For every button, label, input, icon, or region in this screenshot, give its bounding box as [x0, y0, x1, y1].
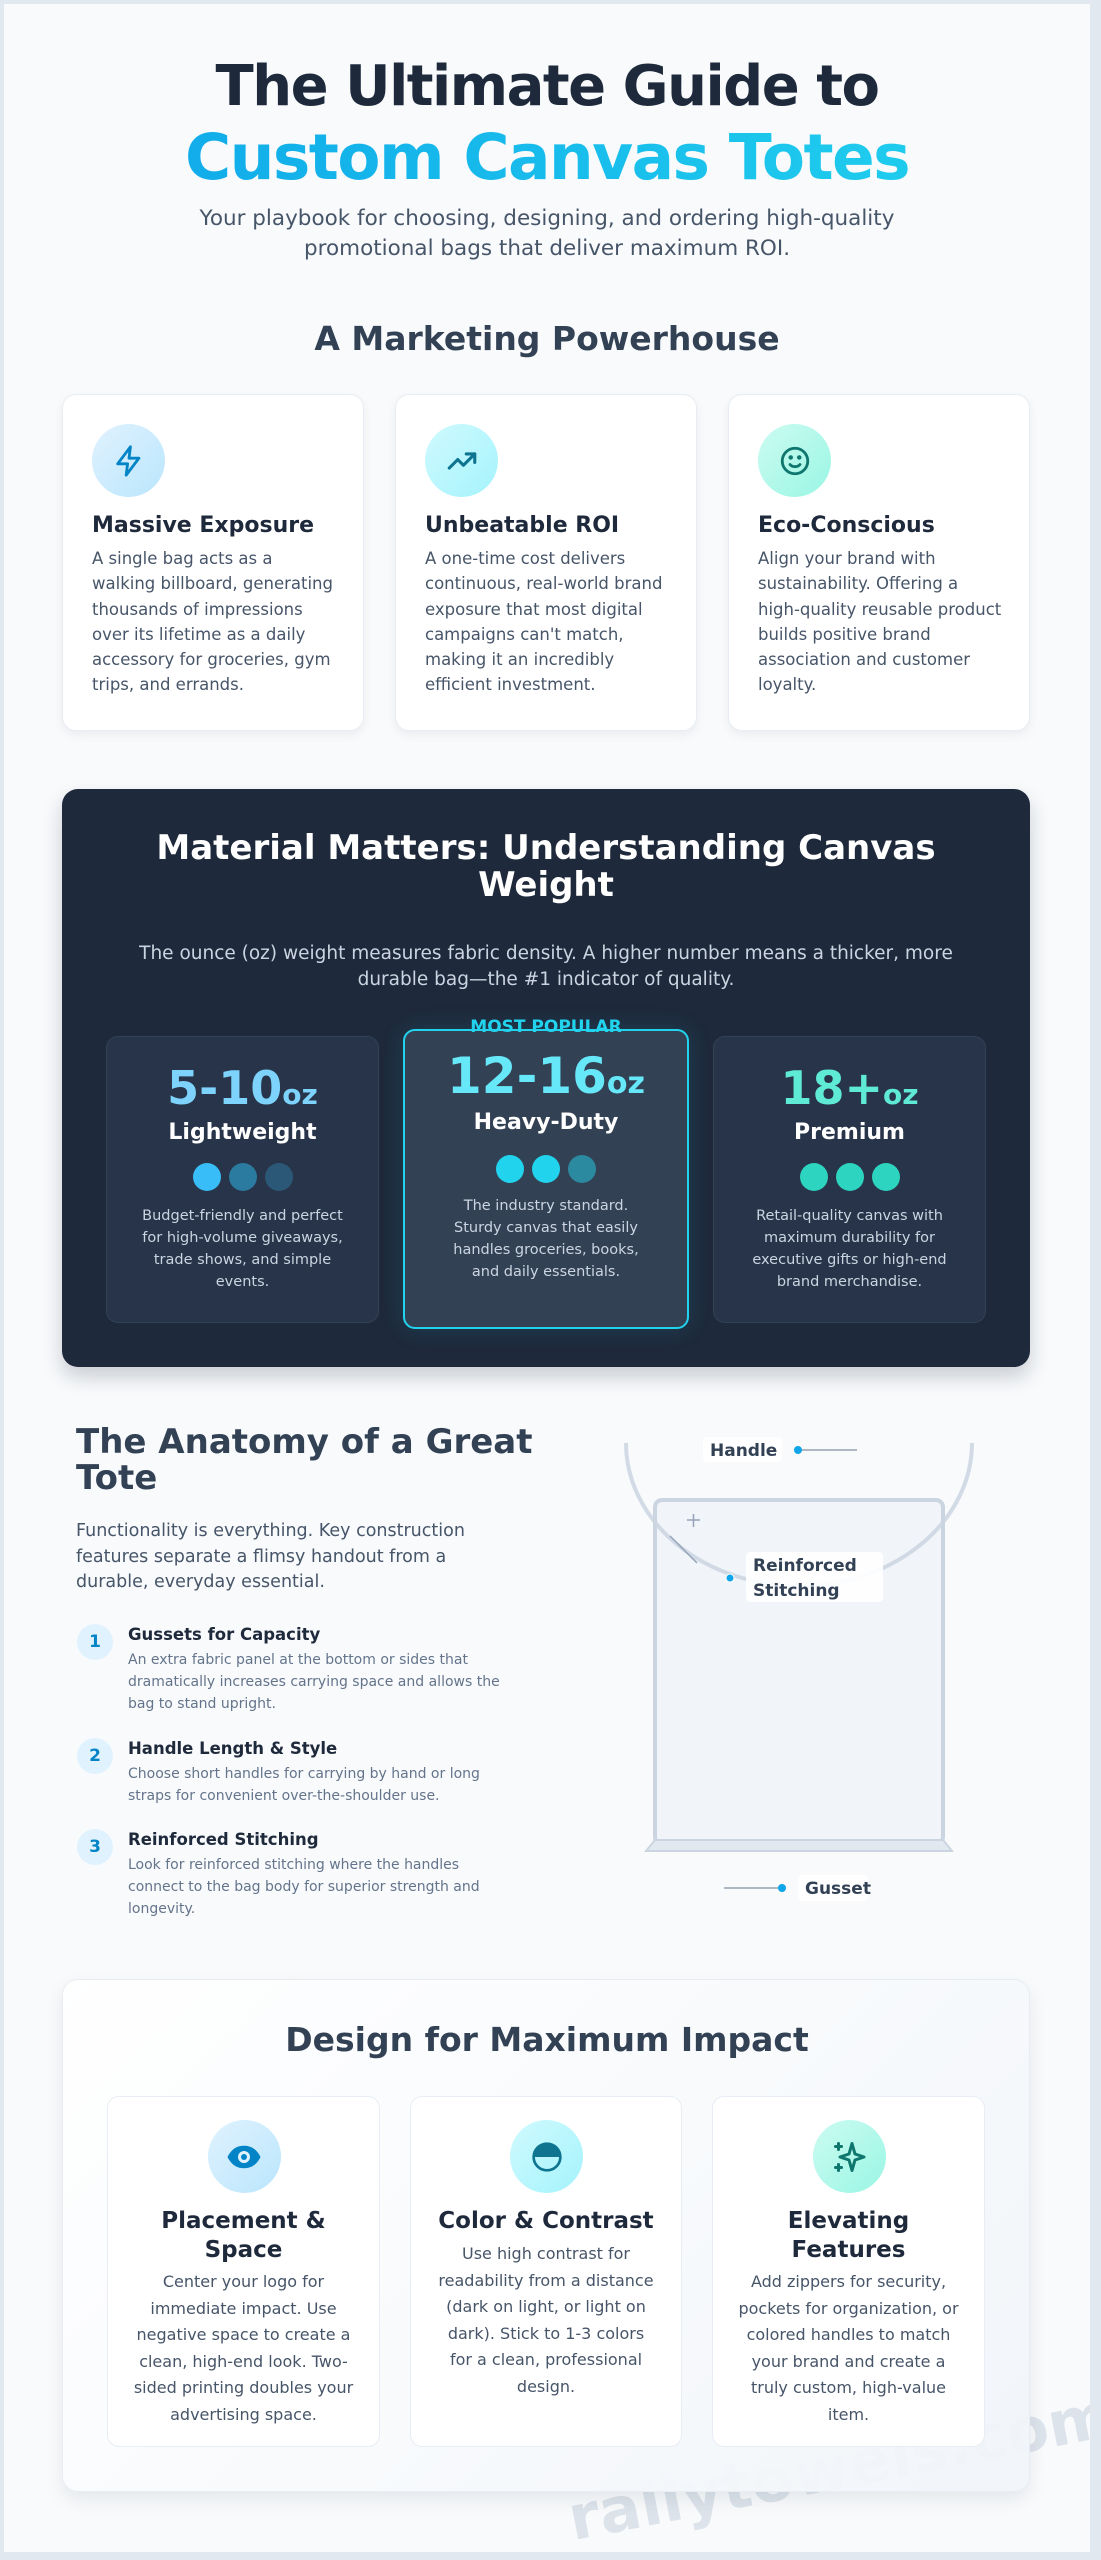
icon: smile	[758, 424, 831, 497]
weight card: premium	[713, 1036, 986, 1323]
panel description: The ounce (oz) weight measures fabric density. A higher number means a thicker, more durable bag—the #1 indicator of quality.	[139, 943, 953, 990]
weight name: Heavy-Duty	[474, 1110, 618, 1135]
item 1: gussets: An extra fabric panel at the bottom or sides that	[128, 1652, 468, 1668]
item 1: gussets: bag to stand upright.	[128, 1696, 276, 1712]
card text: continuous, real-world brand	[425, 574, 662, 593]
card text: sustainability. Offering a	[758, 574, 958, 593]
weight description: Retail-quality canvas with maximum durability for executive gifts or high-end brand merchandise.	[752, 1208, 947, 1290]
card text: thousands of impressions	[92, 600, 303, 619]
card text: Align your brand with	[758, 549, 936, 568]
item 2: handles: straps for convenient over-the-shoulder use.	[128, 1788, 440, 1804]
item 3: stitching: connect to the bag body for superior strength and	[128, 1879, 480, 1895]
label: reinforced stitching: Stitching	[753, 1581, 840, 1601]
panel: Unbeatable ROI	[395, 394, 697, 731]
card text: design.	[517, 2376, 575, 2396]
card text: (dark on light, or light on	[446, 2297, 646, 2316]
icon: contrast	[510, 2120, 583, 2193]
item 1: gussets: 1	[89, 1632, 101, 1652]
panel: Design for Maximum Impact	[62, 1979, 1030, 2492]
label: gusset	[724, 1875, 871, 1901]
card text: pockets for organization, or	[738, 2298, 959, 2318]
weight name: Lightweight	[168, 1120, 317, 1145]
card title: Placement & Space	[161, 2208, 326, 2263]
card text	[438, 2244, 654, 2396]
card title: Eco-Conscious	[758, 513, 935, 538]
design card: placement	[107, 2096, 380, 2447]
card title: Unbeatable ROI	[425, 513, 619, 538]
weight number: 12-16oz	[447, 1047, 645, 1105]
item 1: gussets: dramatically increases carrying space and allows the	[128, 1674, 500, 1690]
title	[185, 54, 909, 194]
card text: Use high contrast for	[462, 2244, 630, 2263]
card text	[738, 2272, 959, 2424]
card text: accessory for groceries, gym	[92, 650, 331, 669]
card text: exposure that most digital	[425, 600, 643, 619]
panel: Material Matters	[62, 789, 1030, 1367]
item 2: handles: Handle Length & Style	[128, 1739, 337, 1758]
item 3: stitching: Look for reinforced stitching where the handles	[128, 1857, 459, 1873]
card text: campaigns can't match,	[425, 625, 624, 644]
card text: item.	[828, 2404, 869, 2424]
icon: trending up	[425, 424, 498, 497]
weight number: 18+oz	[780, 1061, 919, 1115]
handle arc	[626, 1443, 972, 1586]
item 3: stitching: longevity.	[128, 1901, 195, 1917]
stitching marks	[670, 1514, 700, 1563]
title: Custom Canvas Totes	[185, 121, 909, 194]
icon: sparkles	[812, 2120, 886, 2193]
card text: Add zippers for security,	[751, 2272, 946, 2291]
card title: Elevating Features	[788, 2208, 909, 2263]
label: most popular: MOST POPULAR	[470, 1017, 622, 1037]
panel: Massive Exposure	[62, 394, 364, 731]
item 3: stitching	[77, 1829, 480, 1917]
weight card: heavy-duty	[403, 1029, 689, 1329]
card text	[92, 549, 333, 694]
card text: Center your logo for immediate impact. Use negative space to create a clean, high-end look. Two-sided printing doubles your advertising space.	[134, 2272, 353, 2424]
label: gusset: Gusset	[805, 1879, 871, 1899]
icon: lightning	[92, 424, 165, 497]
weight name: Premium	[794, 1120, 905, 1145]
item 3: stitching: Reinforced Stitching	[128, 1830, 319, 1849]
weight description: The industry standard. Sturdy canvas that easily handles groceries, books, and daily essentials.	[453, 1198, 639, 1280]
card text: walking billboard, generating	[92, 574, 333, 593]
design card: features	[712, 2096, 985, 2447]
item 2: handles: 2	[89, 1746, 101, 1766]
label: reinforced stitching: Reinforced	[753, 1556, 857, 1576]
card text: association and customer	[758, 650, 970, 669]
design card: color	[410, 2096, 682, 2447]
card title: Color & Contrast	[438, 2208, 654, 2234]
card text	[758, 549, 1001, 694]
subtitle: Your playbook for choosing, designing, and ordering high-quality promotional bags that deliver maximum ROI.	[200, 206, 894, 261]
card text: dark). Stick to 1-3 colors	[448, 2324, 644, 2342]
card text: your brand and create a	[752, 2352, 945, 2370]
card text	[425, 549, 662, 694]
durability dots	[800, 1163, 900, 1191]
label: handle	[703, 1437, 857, 1462]
icon: eye	[208, 2120, 280, 2193]
card text: trips, and errands.	[92, 675, 244, 694]
item 2: handles: Choose short handles for carrying by hand or long	[128, 1766, 480, 1782]
weight description: Budget-friendly and perfect for high-volume giveaways, trade shows, and simple events.	[142, 1208, 343, 1290]
panel: Eco-Conscious	[728, 394, 1030, 731]
label: handle: Handle	[710, 1441, 777, 1461]
weight card: lightweight	[106, 1036, 379, 1323]
anatomy description: Functionality is everything. Key construction features separate a flimsy handout from a durable, everyday essential.	[76, 1521, 465, 1592]
card title: Massive Exposure	[92, 513, 314, 538]
panel title: Material Matters: Understanding Canvas Weight	[156, 828, 936, 905]
card text: for a clean, professional	[450, 2350, 642, 2369]
item 1: gussets	[77, 1624, 500, 1712]
item 1: gussets: Gussets for Capacity	[128, 1625, 320, 1644]
card text: truly custom, high-value	[751, 2378, 946, 2397]
card text: high-quality reusable product	[758, 600, 1001, 619]
card text: A one-time cost delivers	[425, 549, 625, 568]
heading: anatomy: The Anatomy of a Great Tote	[76, 1422, 532, 1498]
heading: design: Design for Maximum Impact	[285, 2020, 809, 2059]
card text: colored handles to match	[747, 2325, 950, 2344]
item 2: handles	[77, 1738, 480, 1804]
item 3: stitching: 3	[89, 1837, 101, 1857]
bag body	[646, 1500, 952, 1851]
card text: builds positive brand	[758, 625, 931, 644]
card text: efficient investment.	[425, 675, 596, 694]
heading: A Marketing Powerhouse: A Marketing Powerhouse	[314, 319, 780, 358]
card text: over its lifetime as a daily	[92, 625, 305, 644]
card text: A single bag acts as a	[92, 549, 272, 568]
weight number: 5-10oz	[167, 1061, 318, 1115]
card text: making it an incredibly	[425, 650, 614, 669]
durability dots	[496, 1155, 596, 1183]
card text: loyalty.	[758, 675, 816, 694]
card text: readability from a distance	[438, 2270, 654, 2290]
tote diagram	[624, 1441, 974, 1899]
label: reinforced stitching	[726, 1552, 883, 1602]
durability dots	[193, 1163, 293, 1191]
title: The Ultimate Guide to	[216, 54, 878, 119]
